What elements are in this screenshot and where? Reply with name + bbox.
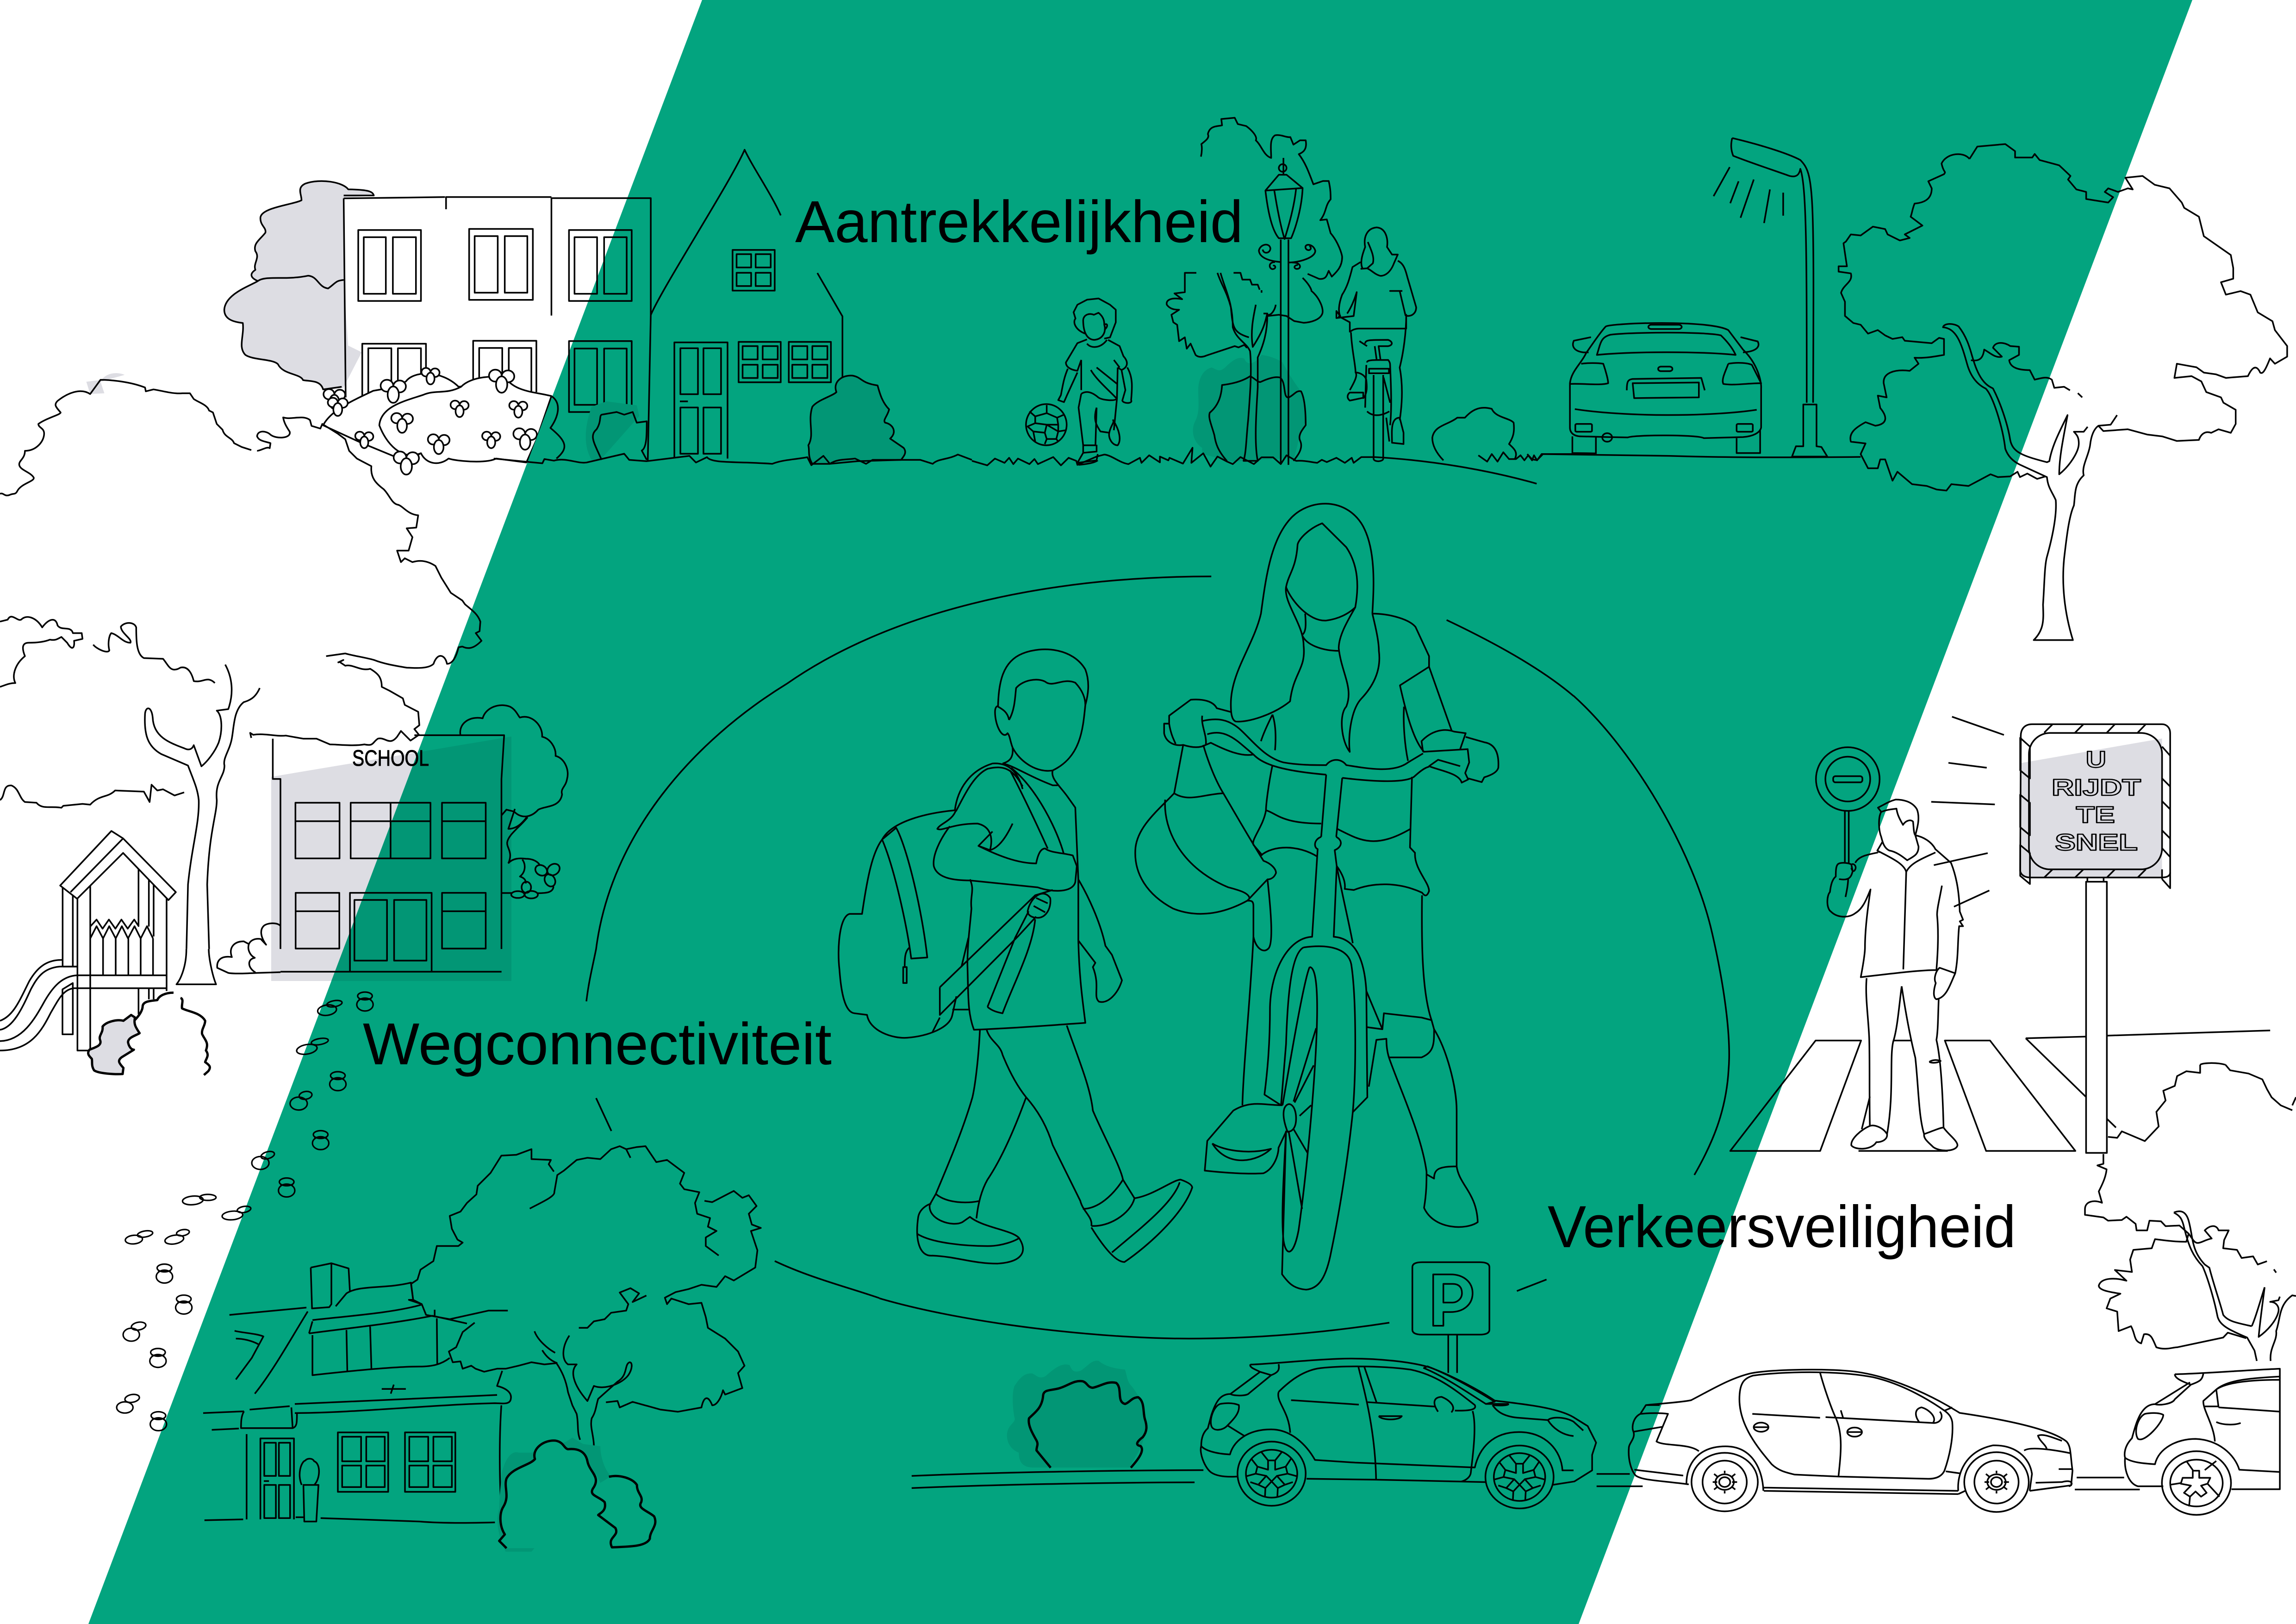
- football: [1026, 404, 1067, 445]
- upper windows: [358, 229, 632, 412]
- lantern: [1259, 158, 1315, 465]
- school upper structure: [273, 735, 504, 949]
- tree: [2085, 1063, 2296, 1361]
- tree outline: [224, 181, 374, 389]
- grey tree top fragment: [87, 373, 124, 394]
- gable: [651, 150, 842, 377]
- building walls: [344, 197, 651, 461]
- heading: Wegconnectiviteit: Wegconnectiviteit: [363, 1011, 832, 1077]
- stepping stones: [117, 992, 373, 1430]
- shaded bush: [498, 1437, 611, 1552]
- boy: [839, 650, 1192, 1264]
- crosswalk: [1730, 1031, 2270, 1151]
- cycle arcs around the children: [586, 684, 1729, 1298]
- tree: [1167, 118, 1342, 461]
- door: [674, 343, 728, 458]
- speed warning sign: TE: [2076, 801, 2115, 828]
- man, crosswalk and speed sign: [1730, 717, 2270, 1153]
- darker school overlay: [331, 737, 511, 981]
- speed warning sign: U: [2086, 746, 2106, 773]
- sedan: [1629, 1370, 2072, 1491]
- child: [1058, 299, 1132, 465]
- upper school windows: [295, 803, 486, 858]
- cyclist: [1337, 227, 1416, 461]
- wheels: [1238, 1442, 1306, 1506]
- small bush: [1432, 408, 1516, 460]
- speed warning sign: [2020, 724, 2170, 1153]
- speed warning sign: RIJDT: [2052, 774, 2141, 800]
- ground floor windows: [739, 342, 831, 382]
- man: [1827, 800, 1963, 1150]
- shaded bush: [1193, 355, 1306, 462]
- street lamp: [1714, 138, 1827, 456]
- sedan, hatchback and lower right tree: [1597, 1063, 2296, 1515]
- school label: SCHOOL: [352, 746, 429, 771]
- ground: [1527, 454, 1860, 460]
- trunk base: [176, 949, 216, 984]
- ground: [494, 454, 972, 465]
- hatchback: [2125, 1369, 2280, 1489]
- tree behind school: [460, 705, 568, 863]
- dark bush: [809, 375, 905, 464]
- lollipop sign: [1816, 747, 1879, 863]
- big tree, left tree and playhouse canopy: [0, 380, 568, 949]
- tree: [411, 1146, 761, 1446]
- bush: [1007, 1361, 1147, 1468]
- top row: child with ball, lantern, cyclist: [972, 118, 1574, 484]
- girl and bicycle: [1135, 504, 1499, 1290]
- small bush: [586, 401, 647, 460]
- warning rays: [1931, 717, 2004, 907]
- children: boy with backpack, girl with bicycle: [787, 504, 1574, 1290]
- school lower floor and shrubs: [217, 858, 561, 974]
- parked car, parking sign and bush: [879, 1262, 1596, 1508]
- bush edge in green: [550, 396, 564, 458]
- grey tree behind terraced houses: [224, 181, 374, 389]
- heading: Aantrekkelijkheid: Aantrekkelijkheid: [795, 189, 1243, 255]
- grey school facade: [271, 737, 511, 981]
- top right: car, street lamp, tree: [1527, 138, 2287, 640]
- car body: [1201, 1359, 1596, 1485]
- ground: [972, 448, 1574, 484]
- house: [203, 1263, 511, 1523]
- playhouse with slide: [0, 831, 210, 1075]
- headings: [363, 189, 2016, 1260]
- lower windows and flowering bush: [323, 341, 551, 475]
- lower left neighbourhood: stones, house, tree, bush: [117, 949, 761, 1552]
- large tree: [1943, 144, 2287, 640]
- attic window: [733, 250, 775, 291]
- terraced houses and gabled house: [224, 150, 972, 465]
- speed warning sign: SNEL: [2055, 829, 2138, 856]
- heading: Verkeersveiligheid: Verkeersveiligheid: [1548, 1194, 2016, 1260]
- rear view car: [1570, 323, 1761, 453]
- parking sign: [1412, 1262, 1547, 1373]
